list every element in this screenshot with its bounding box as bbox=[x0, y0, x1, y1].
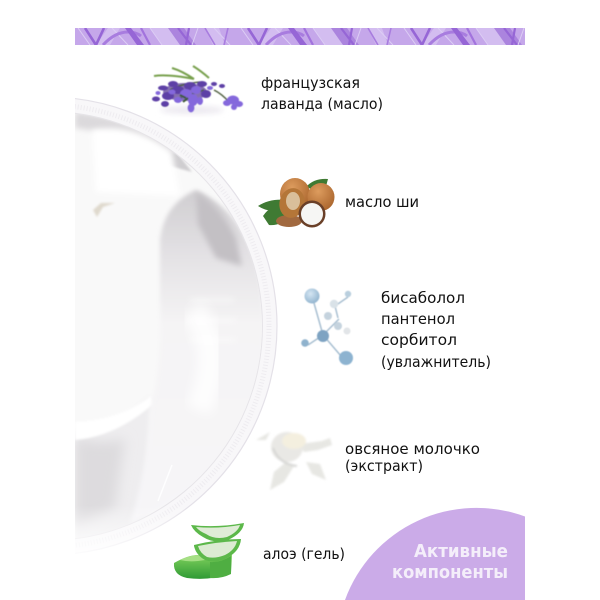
bottom fade of jar bbox=[75, 520, 169, 554]
heading: компоненты bbox=[392, 562, 508, 583]
cream swirl bbox=[139, 189, 261, 508]
label: bisabolol, panthenol, sorbitol: (увлажнитель) bbox=[381, 353, 491, 371]
top decorative banner bbox=[75, 28, 564, 45]
label: oat milk: (экстракт) bbox=[345, 457, 423, 475]
jar rim bbox=[75, 98, 278, 545]
purple corner shape bbox=[345, 508, 525, 600]
icon: milk splash with cream bbox=[256, 432, 332, 490]
label: lavender: лаванда (масло) bbox=[261, 95, 383, 113]
callout: active components bbox=[345, 508, 525, 600]
label: bisabolol, panthenol, sorbitol: бисаболол bbox=[381, 289, 465, 307]
label: bisabolol, panthenol, sorbitol: пантенол bbox=[381, 310, 455, 328]
ingredient: bisabolol group bbox=[301, 288, 491, 371]
ingredient: oat milk bbox=[256, 432, 480, 490]
icon: shea nuts bbox=[258, 178, 334, 228]
label: aloe: алоэ (гель) bbox=[263, 545, 345, 563]
cream surface bbox=[75, 116, 262, 522]
label: lavender: французская bbox=[261, 74, 360, 92]
jar of cream bbox=[75, 98, 278, 545]
icon: aloe slices bbox=[174, 523, 244, 579]
label: shea butter: масло ши bbox=[345, 193, 419, 211]
icon: lavender bunch bbox=[152, 66, 243, 114]
label: oat milk: овсяное молочко bbox=[345, 440, 480, 458]
label: bisabolol, panthenol, sorbitol: сорбитол bbox=[381, 331, 457, 349]
ingredient: lavender bbox=[152, 66, 383, 114]
heading: Активные bbox=[414, 541, 508, 562]
icon: molecule bbox=[301, 288, 353, 365]
ingredient: shea butter bbox=[258, 178, 419, 228]
ingredient: aloe bbox=[174, 523, 345, 579]
